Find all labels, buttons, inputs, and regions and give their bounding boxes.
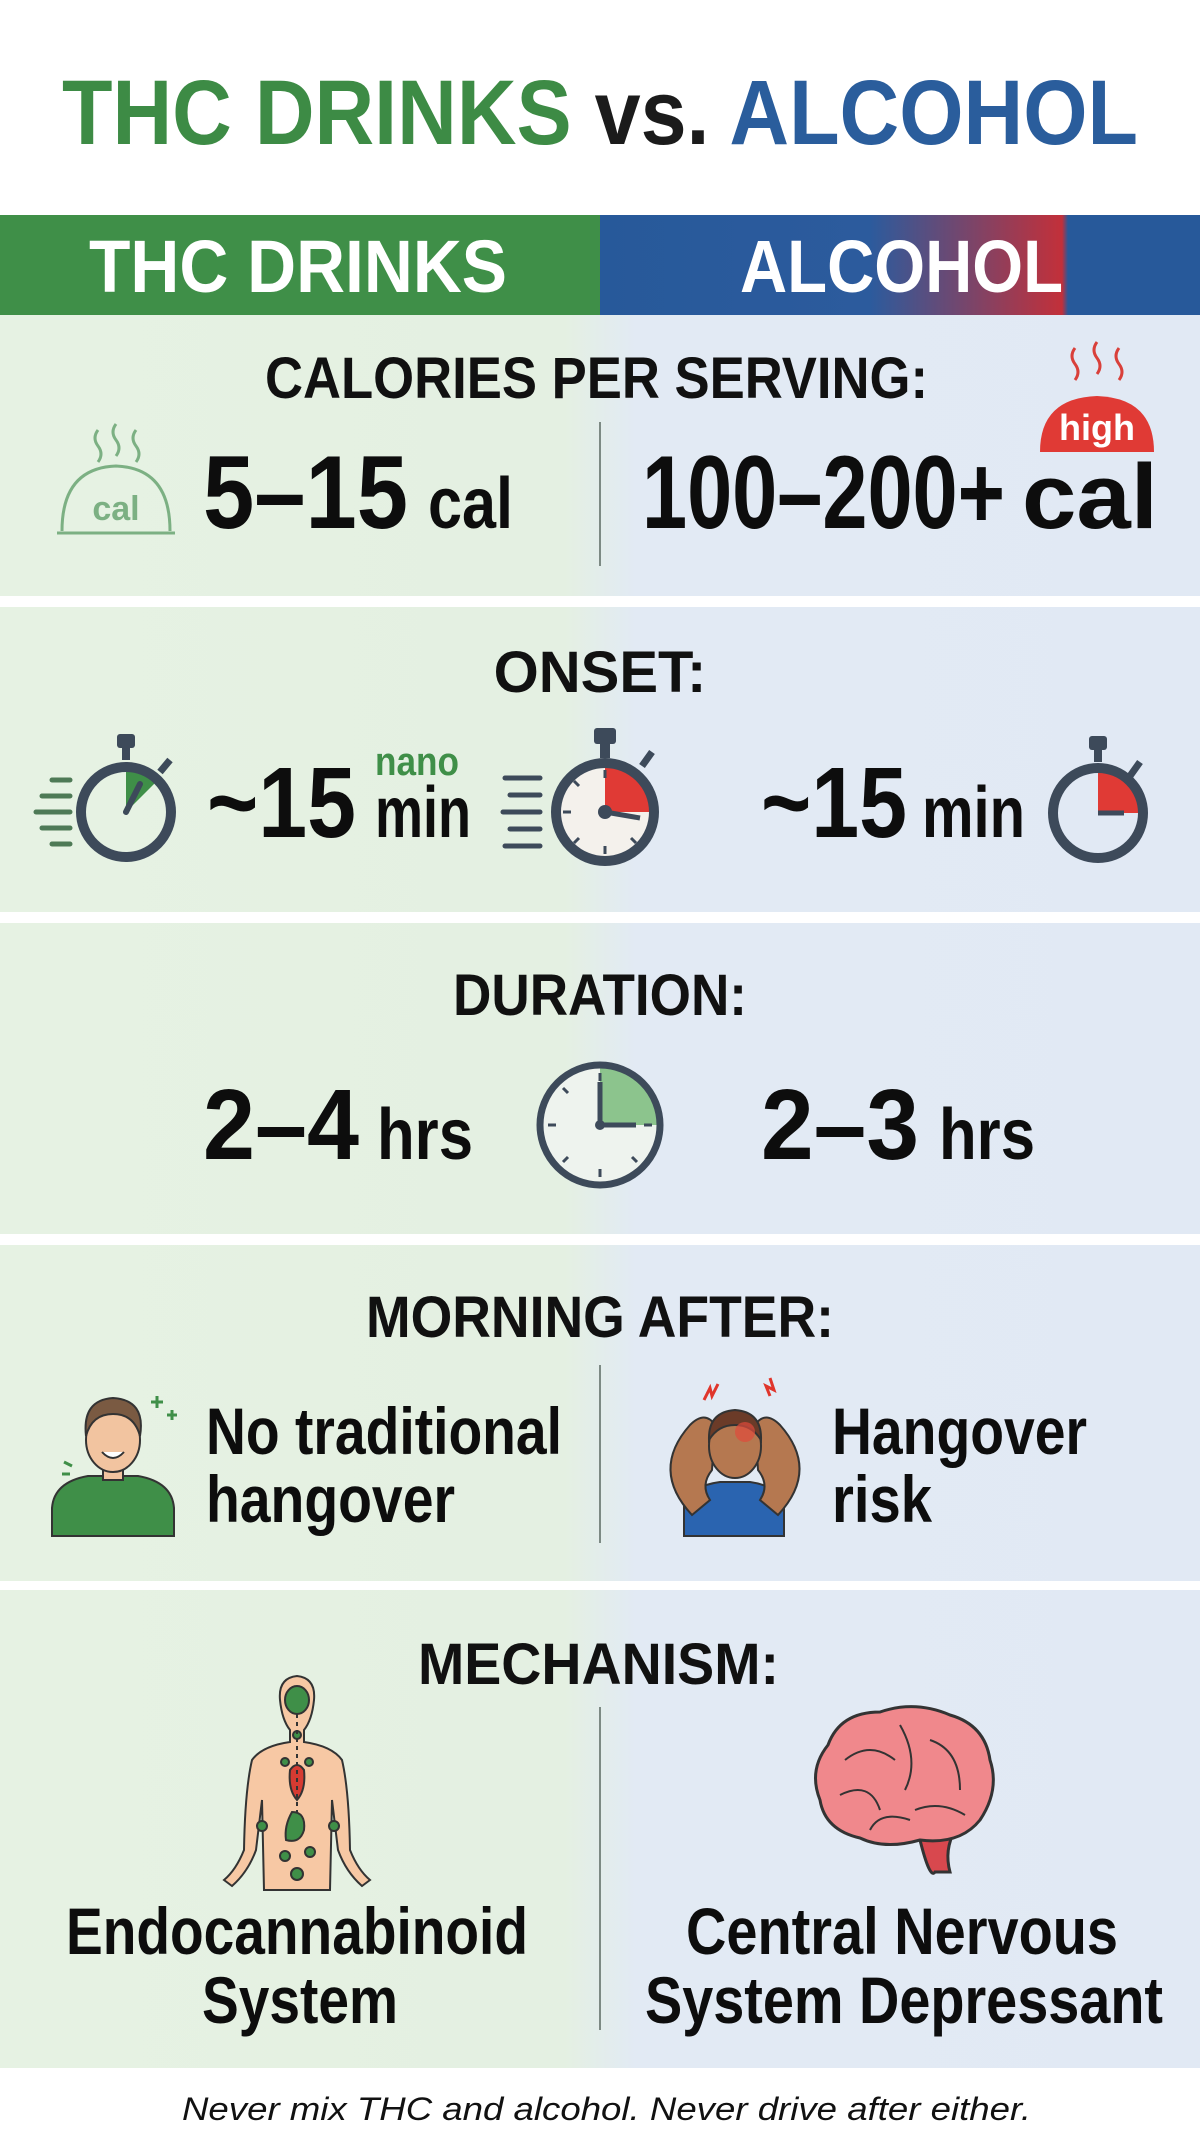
text: no traditional hangover: No traditional	[206, 1394, 562, 1468]
text: cns depressant	[645, 1894, 1163, 2037]
icon: happy person	[52, 1396, 177, 1536]
title: THC DRINKS vs. ALCOHOL	[62, 62, 1138, 164]
icon: headache person	[670, 1378, 800, 1536]
icon: high dome	[1040, 342, 1154, 452]
text: hangover risk	[832, 1394, 1087, 1536]
header bar	[0, 215, 1200, 315]
value: thc calories: 5–15	[203, 435, 408, 551]
value: alcohol calories: cal	[1022, 446, 1158, 548]
panel: duration	[0, 923, 1200, 1234]
text: no traditional hangover: hangover	[206, 1462, 455, 1536]
value: thc onset: nano	[375, 740, 459, 784]
heading: duration: DURATION:	[453, 963, 747, 1028]
value: thc calories: cal	[428, 464, 513, 544]
value: alcohol calories: 100–200+	[642, 435, 1005, 551]
icon: stopwatch alcohol	[1053, 736, 1143, 858]
value: alcohol onset: min	[922, 773, 1025, 853]
text: endocannabinoid system	[66, 1894, 528, 2037]
icon: cal dome	[57, 424, 175, 533]
value: alcohol onset: ~15	[761, 747, 907, 859]
text: endocannabinoid system: System	[202, 1963, 398, 2037]
text: hangover risk: risk	[832, 1462, 932, 1536]
value: thc onset	[207, 740, 471, 859]
heading: morning after: MORNING AFTER:	[366, 1285, 834, 1350]
icon: stopwatch red	[503, 728, 654, 861]
value: thc onset: min	[375, 773, 471, 853]
heading: mechanism: MECHANISM:	[418, 1632, 779, 1697]
icon: clock	[540, 1065, 660, 1185]
panel: mechanism	[0, 1590, 1200, 2068]
panel: calories	[0, 315, 1200, 596]
value: alcohol onset	[761, 747, 1025, 859]
value: alcohol duration: hrs	[939, 1095, 1035, 1175]
icon: brain	[816, 1707, 993, 1873]
header bar: ALCOHOL	[740, 225, 1063, 308]
value: thc onset: ~15	[207, 747, 356, 859]
icon: body endocannabinoid	[224, 1676, 370, 1890]
header bar: THC DRINKS	[89, 225, 507, 308]
text: no traditional hangover	[206, 1394, 562, 1536]
value: alcohol duration	[761, 1069, 1035, 1181]
footer note: Never mix THC and alcohol. Never drive after either.	[182, 2091, 1031, 2127]
icon: stopwatch green	[36, 734, 171, 857]
heading: onset: ONSET:	[494, 640, 706, 705]
icon: cal dome: cal	[92, 490, 140, 528]
value: thc duration: hrs	[377, 1095, 473, 1175]
heading: calories: CALORIES PER SERVING:	[265, 346, 928, 411]
text: endocannabinoid system: Endocannabinoid	[66, 1894, 528, 1968]
panel: onset	[0, 607, 1200, 912]
icon: high dome: high	[1059, 407, 1135, 448]
value: thc duration	[203, 1069, 473, 1181]
value: alcohol duration: 2–3	[761, 1069, 919, 1181]
text: hangover risk: Hangover	[832, 1394, 1087, 1468]
value: thc duration: 2–4	[203, 1069, 359, 1181]
panel: morning after	[0, 1245, 1200, 1581]
text: cns depressant: Central Nervous	[686, 1894, 1118, 1968]
